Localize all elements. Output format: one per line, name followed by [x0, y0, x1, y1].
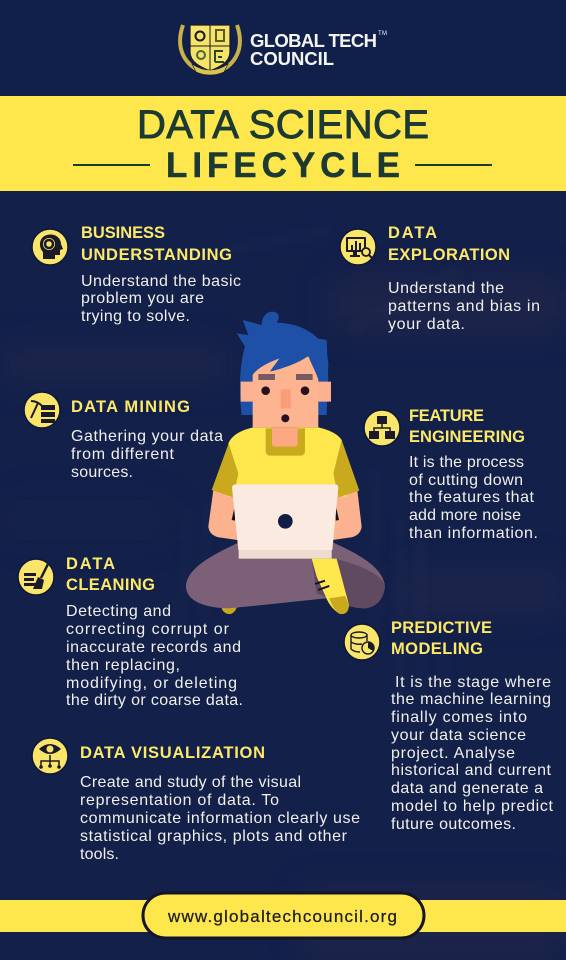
collar	[266, 428, 305, 456]
eyes	[261, 386, 309, 395]
ears	[241, 382, 331, 402]
text: It is the stage where	[395, 674, 551, 691]
icon: database with chart	[344, 624, 380, 660]
text: communicate information clearly use	[80, 810, 360, 827]
text: data and generate a	[391, 780, 543, 797]
text: representation of data. To	[80, 792, 279, 809]
text: statistical graphics, plots and other	[80, 828, 348, 845]
section: data cleaning	[18, 555, 243, 709]
url text: www.globaltechcouncil.org	[167, 907, 397, 926]
heading: MODELING	[391, 640, 483, 658]
text: Understand the	[388, 280, 504, 297]
heading: UNDERSTANDING	[81, 246, 232, 264]
heading: DATA MINING	[71, 398, 190, 416]
sleeves	[212, 440, 359, 497]
icon: eye with network	[32, 738, 68, 774]
text: patterns and bias in	[388, 298, 540, 315]
heading	[391, 619, 492, 658]
text	[66, 603, 243, 709]
text: tools.	[80, 846, 119, 863]
right leg shade	[312, 559, 385, 608]
text: trying to solve.	[81, 308, 190, 325]
text: your data science	[391, 727, 526, 744]
text	[409, 454, 538, 542]
nose	[281, 389, 291, 408]
title line 2: LIFECYCLE	[166, 146, 400, 185]
section: data exploration	[340, 224, 540, 333]
text: inaccurate records and	[66, 639, 241, 656]
text: model to help predict	[391, 798, 554, 815]
heading: ENGINEERING	[409, 428, 525, 446]
arms	[208, 490, 362, 541]
logo wordmark	[250, 30, 387, 69]
text: the machine learning	[391, 691, 551, 708]
text	[388, 280, 540, 333]
logo emblem	[180, 25, 240, 75]
heading: EXPLORATION	[388, 246, 510, 264]
icon: pickaxe and servers	[24, 392, 60, 428]
heading	[66, 555, 155, 594]
heading: DATA VISUALIZATION	[80, 744, 265, 762]
section: data mining	[24, 392, 223, 481]
heading: DATA	[66, 555, 115, 573]
icon: head with gear	[32, 229, 68, 265]
text	[80, 774, 360, 863]
text: then replacing,	[66, 657, 180, 674]
text: Understand the basic	[81, 273, 241, 290]
text: the dirty or coarse data.	[66, 692, 243, 709]
icon: broom and rows	[18, 559, 54, 595]
text: sources.	[71, 464, 133, 481]
heading: BUSINESS	[81, 224, 165, 242]
legs	[186, 543, 385, 608]
eyebrows	[258, 374, 313, 380]
neck	[272, 427, 298, 447]
heading: CLEANING	[66, 576, 155, 594]
section: data visualization	[32, 738, 360, 863]
face	[253, 357, 318, 427]
icon: hierarchy	[364, 410, 400, 446]
text: modifying, or deleting	[66, 675, 237, 692]
left foot	[222, 603, 238, 614]
title band	[0, 96, 566, 191]
text: problem you are	[81, 290, 204, 307]
fringe	[245, 330, 328, 382]
heading	[388, 224, 510, 264]
title line 1: DATA SCIENCE	[137, 103, 429, 147]
text: It is the process	[409, 454, 524, 471]
text: of cutting down	[409, 472, 523, 489]
hair	[237, 312, 328, 415]
heading: FEATURE	[409, 407, 484, 425]
text: Gathering your data	[71, 428, 223, 445]
heading	[409, 407, 525, 446]
logo: Global Tech Council	[180, 25, 387, 75]
text: the features that	[409, 489, 535, 506]
icon: monitor with magnifier	[340, 229, 376, 265]
heading: DATA	[388, 224, 437, 242]
section: feature engineering	[364, 407, 538, 542]
section: predictive modeling	[344, 619, 554, 833]
figure: person with laptop	[186, 312, 385, 614]
heading	[81, 224, 232, 264]
heading: PREDICTIVE	[391, 619, 492, 637]
text: Create and study of the visual	[80, 774, 301, 791]
logo wordmark: GLOBAL TECH	[250, 30, 377, 51]
text: finally comes into	[391, 709, 527, 726]
text	[81, 273, 241, 325]
text: your data.	[388, 316, 465, 333]
laptop	[232, 484, 338, 550]
text: Detecting and	[66, 603, 171, 620]
text: historical and current	[391, 762, 552, 779]
url pill	[143, 893, 424, 938]
logo wordmark: COUNCIL	[250, 48, 334, 69]
text	[391, 674, 554, 833]
logo wordmark: TM	[378, 31, 387, 37]
text: future outcomes.	[391, 816, 516, 833]
text: correcting corrupt or	[66, 621, 230, 638]
shirt	[228, 427, 347, 497]
footer band	[0, 893, 566, 938]
text: project. Analyse	[391, 745, 515, 762]
text: from different	[71, 446, 175, 463]
mouth	[281, 414, 289, 422]
section: business understanding	[32, 224, 241, 325]
text: add more noise	[409, 507, 521, 524]
foot	[312, 559, 349, 614]
text: than information.	[409, 525, 538, 542]
text	[71, 428, 223, 481]
